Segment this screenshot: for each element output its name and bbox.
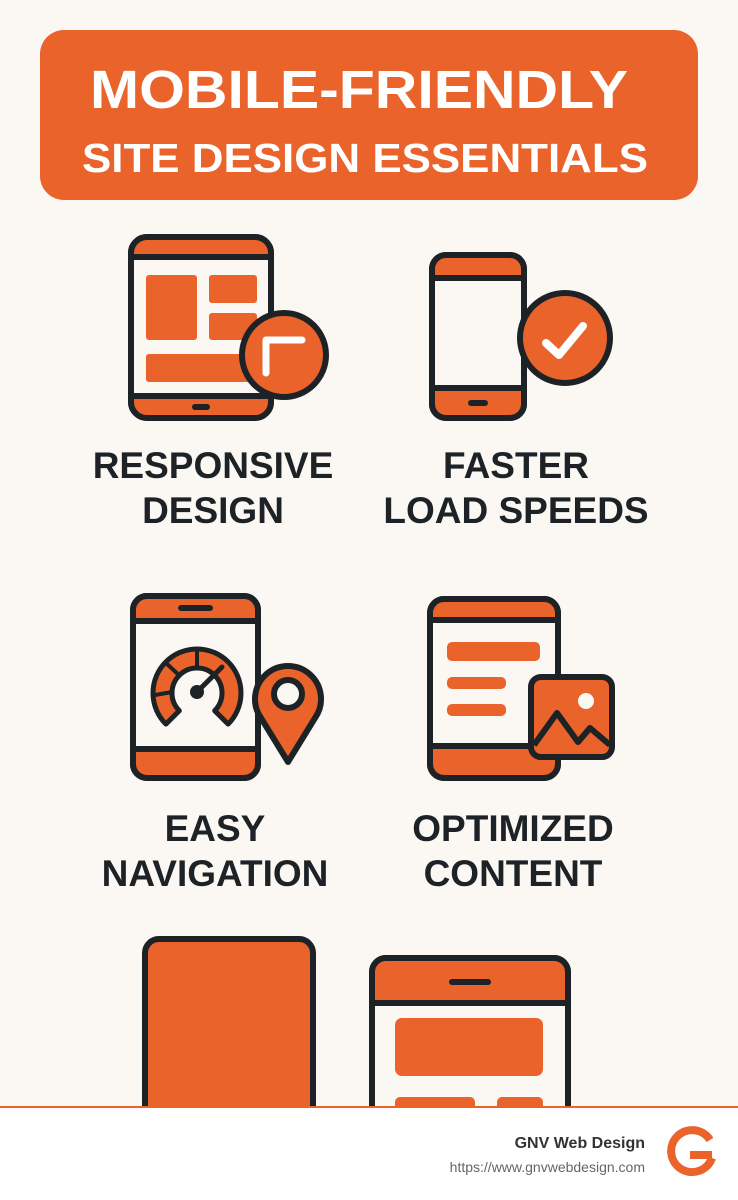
icon: optimized content <box>430 599 612 778</box>
footer: GNV Web Design <box>515 1135 645 1152</box>
label: faster load speeds <box>383 445 649 531</box>
label: responsive design: DESIGN <box>142 490 284 531</box>
label: easy navigation: EASY <box>165 808 266 849</box>
label: easy navigation: NAVIGATION <box>102 853 328 894</box>
icon: bottom phone <box>372 958 568 1111</box>
icon: bottom tablet <box>145 939 313 1110</box>
label: responsive design: RESPONSIVE <box>93 445 333 486</box>
footer: https://www.gnvwebdesign.com <box>450 1159 645 1175</box>
label: optimized content: OPTIMIZED <box>412 808 614 849</box>
label: optimized content: CONTENT <box>424 853 603 894</box>
icon: navigation phone <box>133 596 321 778</box>
icon: responsive tablet <box>131 237 326 418</box>
label: optimized content <box>412 808 614 894</box>
label: responsive design <box>93 445 333 531</box>
icon: phone with check <box>432 255 610 418</box>
title banner: MOBILE-FRIENDLY <box>90 60 628 120</box>
title banner <box>40 30 698 200</box>
footer <box>0 1106 738 1200</box>
label: faster load speeds: LOAD SPEEDS <box>383 490 649 531</box>
label: faster load speeds: FASTER <box>443 445 589 486</box>
title banner: SITE DESIGN ESSENTIALS <box>82 135 648 181</box>
label: easy navigation <box>102 808 328 894</box>
icon: logo G <box>671 1130 712 1172</box>
